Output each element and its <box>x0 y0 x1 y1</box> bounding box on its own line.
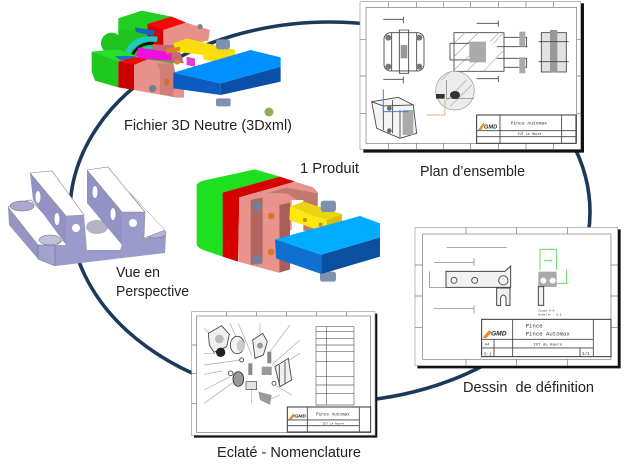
label: 1 Produit: 1 Produit <box>300 161 359 177</box>
title block: 5:1 <box>484 352 492 357</box>
icon: perspective view of part <box>8 167 166 266</box>
title block <box>477 115 576 143</box>
label: Vue en Perspective: Vue en <box>116 265 160 281</box>
label: Eclaté - Nomenclature: Eclaté - Nomenclature <box>217 445 361 461</box>
panel: Dessin de définition drawing sheet: Echelle : 5:1 <box>538 313 562 317</box>
label: Vue en Perspective: Perspective <box>116 284 189 300</box>
title block: GMD <box>491 330 507 337</box>
panel: Plan d'ensemble drawing sheet <box>360 2 584 153</box>
title block <box>482 319 611 357</box>
title block: Pince Automax <box>526 331 570 338</box>
title block: GMD <box>294 413 306 419</box>
panel: Dessin de définition drawing sheet <box>415 227 621 368</box>
title block: 1/1 <box>582 352 590 357</box>
panel: Eclaté nomenclature drawing sheet <box>192 312 377 438</box>
title block: Pince Automax <box>511 120 547 126</box>
title block: A4 <box>485 343 490 347</box>
title block: Pince <box>526 323 543 330</box>
title block: GMD <box>484 125 497 131</box>
label: Fichier 3D Neutre: Fichier 3D Neutre (3Dxml) <box>124 118 292 134</box>
title block: IUT du Havre <box>533 342 563 347</box>
label: Plan d'ensemble: Plan d’ensemble <box>420 164 525 180</box>
panel: Dessin de définition drawing sheet: Coupe A-A <box>538 310 555 313</box>
title block: Pince Automax <box>316 413 350 418</box>
icon: small 3Dxml globe <box>264 108 274 116</box>
title block <box>287 407 371 432</box>
label: Dessin de définition: Dessin de définition <box>463 380 594 396</box>
title block: IUT Le Havre <box>323 421 344 425</box>
title block: IUT Le Havre <box>518 132 542 136</box>
icon: 3D model neutral assembly <box>92 11 281 106</box>
base plate top left <box>8 200 66 250</box>
icon: central product assembly <box>197 169 380 282</box>
cycle arc connecting the views <box>70 22 590 402</box>
